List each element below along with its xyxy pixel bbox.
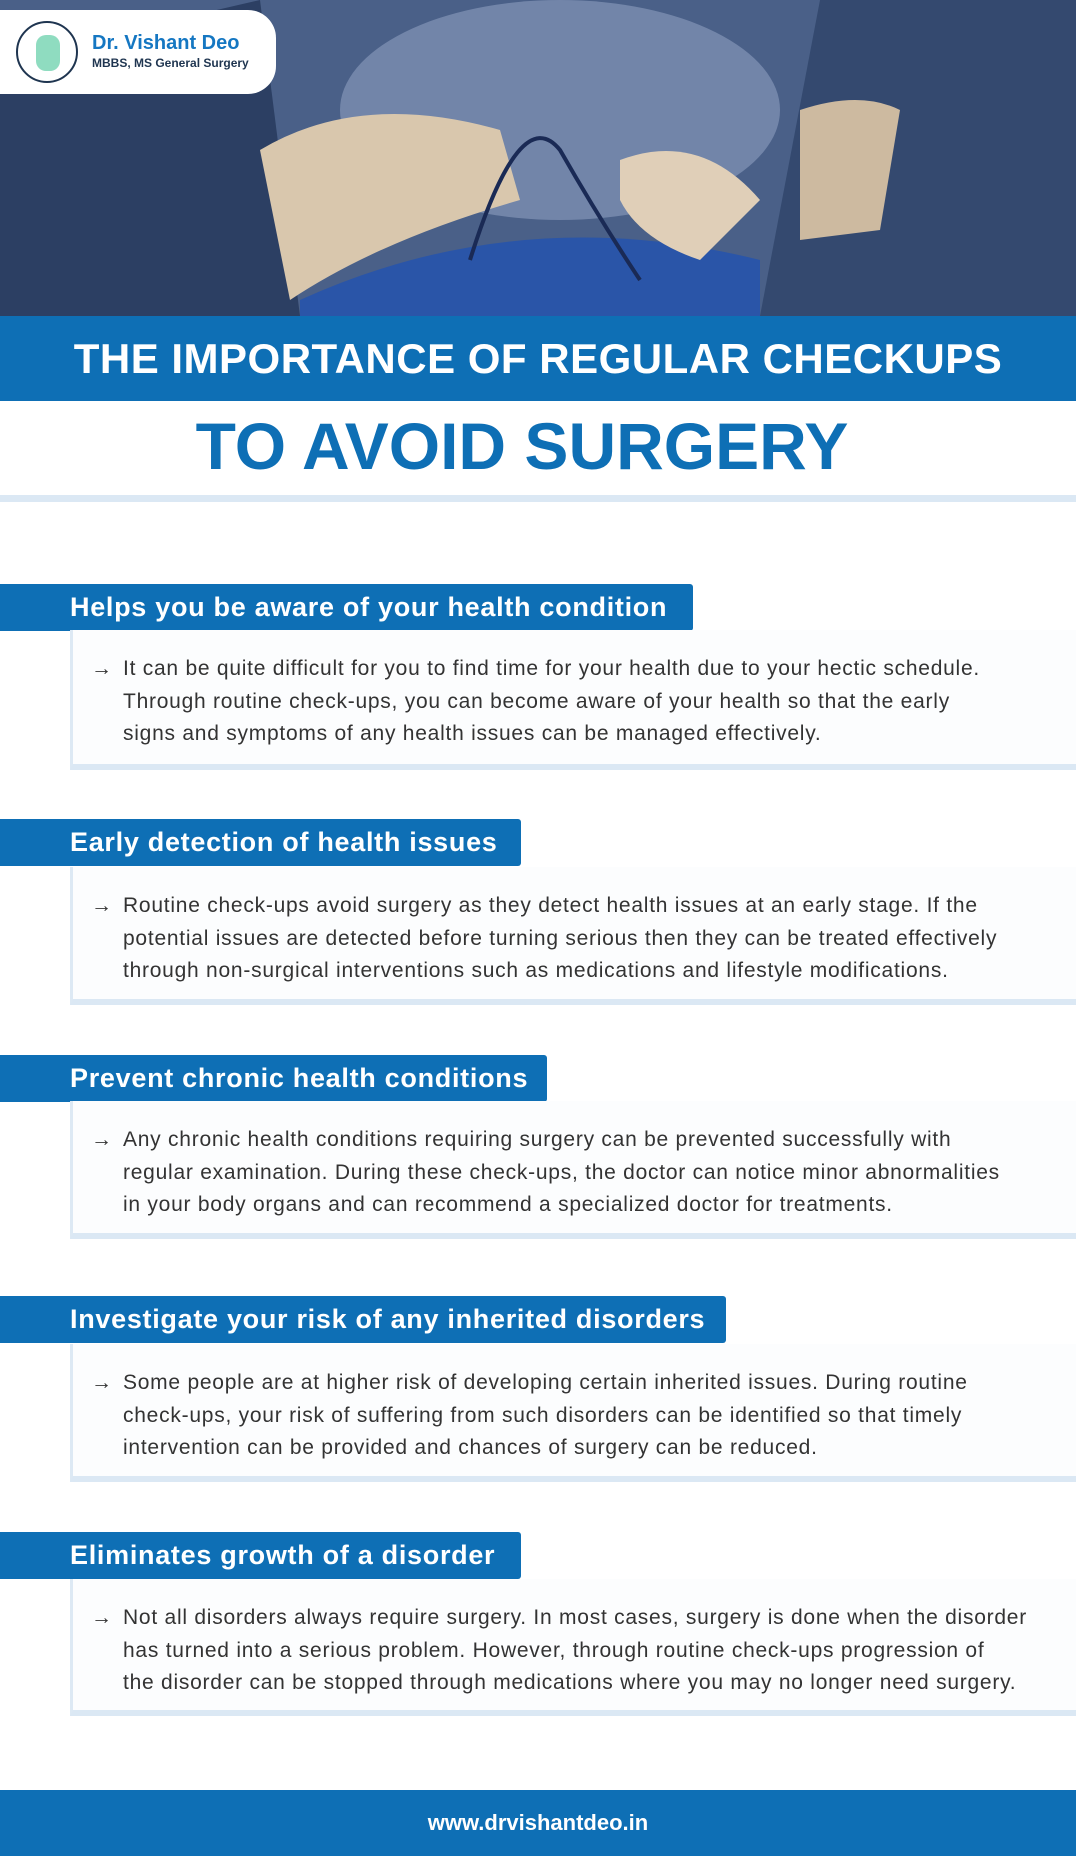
logo text: MBBS, MS General Surgery: [92, 56, 249, 70]
logo text: [92, 32, 249, 70]
text 3: regular examination. During these check-ups, the doctor can notice minor abnormalities: [123, 1160, 1000, 1184]
section 3: [0, 1055, 1076, 1239]
section 4: [0, 1296, 1076, 1482]
text 5: has turned into a serious problem. However, through routine check-ups progression of: [123, 1638, 984, 1662]
text 1: →: [91, 657, 112, 680]
heading 3: Prevent chronic health conditions: [70, 1063, 528, 1093]
text 1: It can be quite difficult for you to find time for your health due to your hectic schedule.: [123, 657, 980, 680]
text 3: Any chronic health conditions requiring surgery can be prevented successfully with: [123, 1128, 951, 1151]
heading 5: Eliminates growth of a disorder: [70, 1540, 495, 1570]
logo text: Dr. Vishant Deo: [92, 32, 239, 54]
text 1: [70, 630, 1076, 770]
text 4: [70, 1344, 1076, 1482]
heading 1: Helps you be aware of your health condition: [70, 592, 667, 622]
footer: www.drvishantdeo.in: [428, 1810, 648, 1835]
title band: [0, 316, 1076, 401]
text 5: the disorder can be stopped through medications where you may no longer need surgery.: [123, 1671, 1016, 1694]
icon: logo circle: [16, 21, 78, 83]
text 5: [70, 1579, 1076, 1716]
heading 4: Investigate your risk of any inherited disorders: [70, 1304, 705, 1334]
text 4: check-ups, your risk of suffering from such disorders can be identified so that timely: [123, 1404, 962, 1426]
text 4: →: [91, 1371, 112, 1394]
section 2: [0, 819, 1076, 1005]
text 2: →: [91, 894, 112, 917]
subtitle: TO AVOID SURGERY: [196, 409, 848, 483]
text 3: →: [91, 1128, 112, 1151]
section 1: [0, 584, 1076, 770]
heading 1: [0, 584, 693, 631]
heading 4: [0, 1296, 726, 1343]
logo badge: [0, 10, 276, 94]
text 4: intervention can be provided and chances of surgery can be reduced.: [123, 1436, 818, 1459]
heading 2: Early detection of health issues: [70, 827, 498, 857]
section 5: [0, 1532, 1076, 1716]
text 2: [70, 867, 1076, 1005]
text 2: through non-surgical interventions such as medications and lifestyle modifications.: [123, 959, 949, 982]
heading 5: [0, 1532, 521, 1579]
text 2: potential issues are detected before turning serious then they can be treated effectively: [123, 926, 997, 950]
text 5: →: [91, 1606, 112, 1629]
photo header: [0, 0, 1076, 316]
text 1: Through routine check-ups, you can become aware of your health so that the early: [123, 690, 950, 712]
heading 2: [0, 819, 521, 866]
text 1: signs and symptoms of any health issues can be managed effectively.: [123, 722, 822, 745]
footer: [0, 1790, 1076, 1856]
text 5: Not all disorders always require surgery. In most cases, surgery is done when the disorder: [123, 1606, 1027, 1629]
text 4: Some people are at higher risk of developing certain inherited issues. During routine: [123, 1371, 968, 1394]
heading 3: [0, 1055, 547, 1102]
text 2: Routine check-ups avoid surgery as they detect health issues at an early stage. If the: [123, 894, 978, 917]
title band: THE IMPORTANCE OF REGULAR CHECKUPS: [74, 335, 1002, 382]
text 3: in your body organs and can recommend a specialized doctor for treatments.: [123, 1193, 893, 1216]
text 3: [70, 1101, 1076, 1239]
